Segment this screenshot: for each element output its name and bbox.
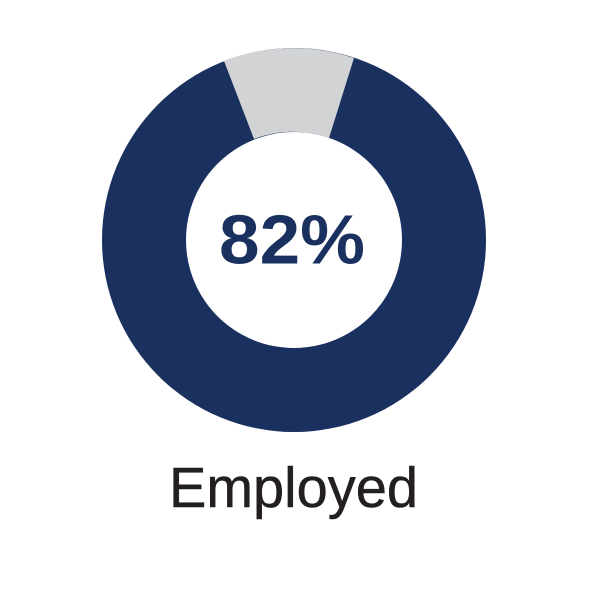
percentage value: 82% — [219, 200, 365, 278]
donut chart — [102, 48, 486, 432]
label: Employed: Employed — [169, 456, 418, 520]
ring segment: remainder 18% — [224, 48, 354, 139]
donut hole — [186, 132, 402, 348]
ring segment: employed 82% — [102, 48, 486, 432]
